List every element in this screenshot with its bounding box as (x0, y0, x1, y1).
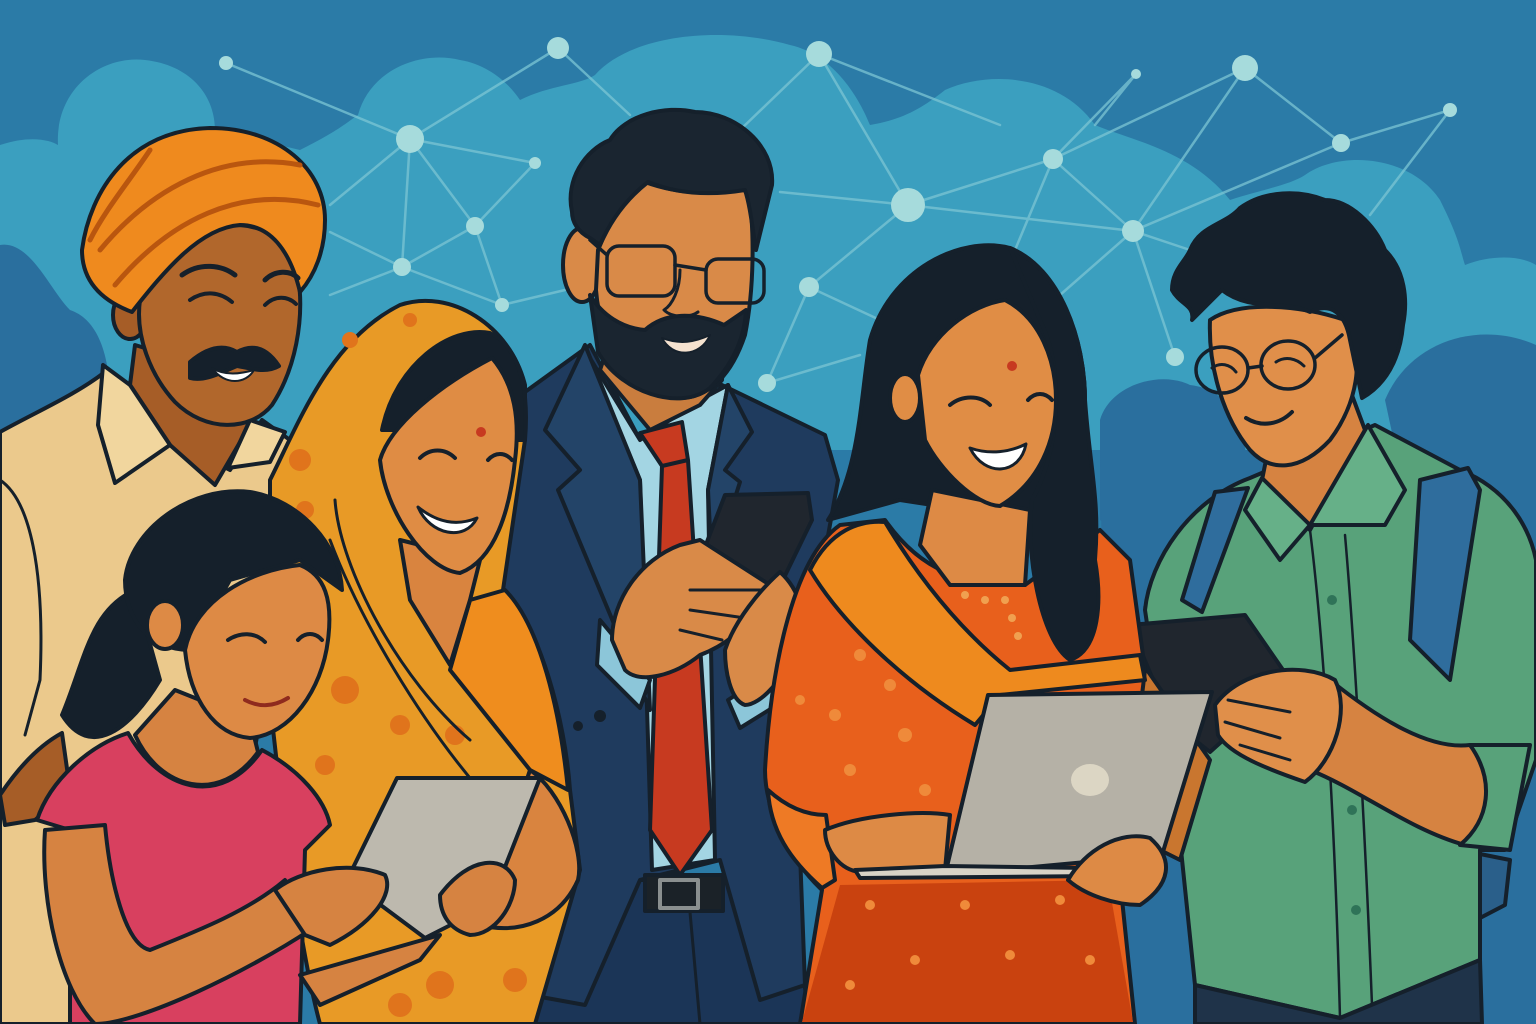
forearm (1310, 680, 1512, 845)
trousers (530, 880, 810, 1024)
hand (1215, 670, 1341, 782)
hair (382, 332, 526, 440)
shirt buttons (1327, 595, 1361, 915)
smile (418, 507, 477, 533)
shirt placket (1310, 530, 1372, 1018)
tablet (347, 778, 540, 938)
hand on girl's shoulder (0, 733, 70, 825)
collar (98, 365, 170, 483)
curly hair (1172, 193, 1405, 398)
laptop (945, 692, 1212, 875)
ear (147, 601, 183, 649)
eyes (1212, 359, 1304, 372)
person: girl in pink top (37, 491, 540, 1024)
dark tablet (1130, 615, 1290, 752)
tie (640, 422, 712, 875)
neck (1260, 390, 1365, 530)
face (596, 182, 753, 398)
backpack straps (1182, 488, 1248, 612)
trouser crease (690, 912, 700, 1024)
hand on tablet left (275, 868, 387, 945)
rolled sleeve (1460, 745, 1530, 850)
hair (571, 110, 772, 250)
glasses (1196, 335, 1342, 393)
backpack (1460, 850, 1510, 918)
lapels (545, 345, 650, 710)
neck (920, 490, 1030, 585)
right hand (1068, 836, 1166, 905)
person: older man in orange turban (0, 128, 325, 1024)
eyes (190, 293, 296, 305)
saree (270, 301, 580, 1024)
neckline embroidery (961, 591, 1022, 640)
finger lines (680, 590, 762, 640)
green shirt (1145, 425, 1536, 1018)
hand on tablet right (440, 863, 515, 935)
smile (1246, 412, 1292, 424)
left hand (825, 813, 950, 872)
neck (135, 690, 258, 785)
right arm (480, 770, 579, 928)
kurta dots (795, 649, 1095, 990)
neck (400, 540, 480, 665)
smile (212, 368, 254, 381)
mouth (662, 335, 710, 353)
turban (82, 128, 325, 312)
hair back (828, 245, 1085, 520)
hair (125, 491, 342, 650)
hand holding phone (612, 540, 770, 677)
person: woman in orange kurta (765, 245, 1212, 1024)
laptop base (855, 866, 1100, 878)
second arm (300, 935, 440, 1005)
saree folds (330, 500, 480, 790)
eyes (950, 394, 1052, 405)
light clouds (0, 35, 1536, 450)
eyes (420, 450, 512, 460)
neck (600, 330, 725, 430)
bindi (1007, 361, 1017, 371)
face (185, 565, 329, 738)
ponytail (62, 590, 160, 737)
face (380, 358, 517, 573)
belt (645, 875, 723, 911)
beard (590, 295, 746, 398)
phone (700, 493, 812, 590)
eyes (228, 634, 322, 642)
ear (563, 228, 601, 302)
kurta lower shading (802, 880, 1133, 1022)
second hand (725, 572, 803, 705)
left cuff (597, 620, 650, 708)
jacket buttons (573, 710, 606, 731)
dark lower clouds (0, 245, 1536, 1024)
kurta (765, 520, 1145, 1024)
ear (890, 374, 920, 422)
network lines (226, 48, 1450, 383)
neck (130, 345, 250, 485)
right cuff (728, 670, 785, 728)
face (918, 300, 1056, 506)
smile (245, 698, 288, 705)
suit jacket (500, 345, 838, 1005)
person: businessman in navy suit (500, 110, 838, 1024)
person: woman in yellow saree (270, 301, 580, 1024)
shirt (0, 372, 300, 1024)
smile (970, 444, 1026, 469)
turban folds (90, 150, 318, 285)
hair over shoulder (1010, 248, 1098, 660)
network of connected nodes (219, 37, 1457, 392)
laptop logo (1071, 764, 1109, 796)
left sleeve (768, 790, 835, 888)
dupatta (810, 522, 1145, 725)
network nodes (219, 37, 1457, 392)
saree blotches (289, 313, 527, 1017)
face (139, 225, 300, 425)
face (1210, 307, 1357, 465)
collar (1245, 478, 1310, 560)
right forearm (1140, 660, 1210, 860)
nose (664, 270, 698, 316)
pink shirt (37, 733, 330, 1024)
moustache (190, 348, 279, 379)
bindi (476, 427, 486, 437)
finger lines (1225, 700, 1290, 760)
glasses (590, 240, 764, 303)
shirt (585, 350, 728, 870)
ear (1355, 322, 1389, 378)
blouse (450, 590, 568, 790)
ear (113, 291, 147, 339)
person: young man in green shirt (1130, 193, 1536, 1024)
trousers (1195, 960, 1482, 1024)
sleeve fold (0, 480, 41, 735)
arm (44, 825, 310, 1024)
